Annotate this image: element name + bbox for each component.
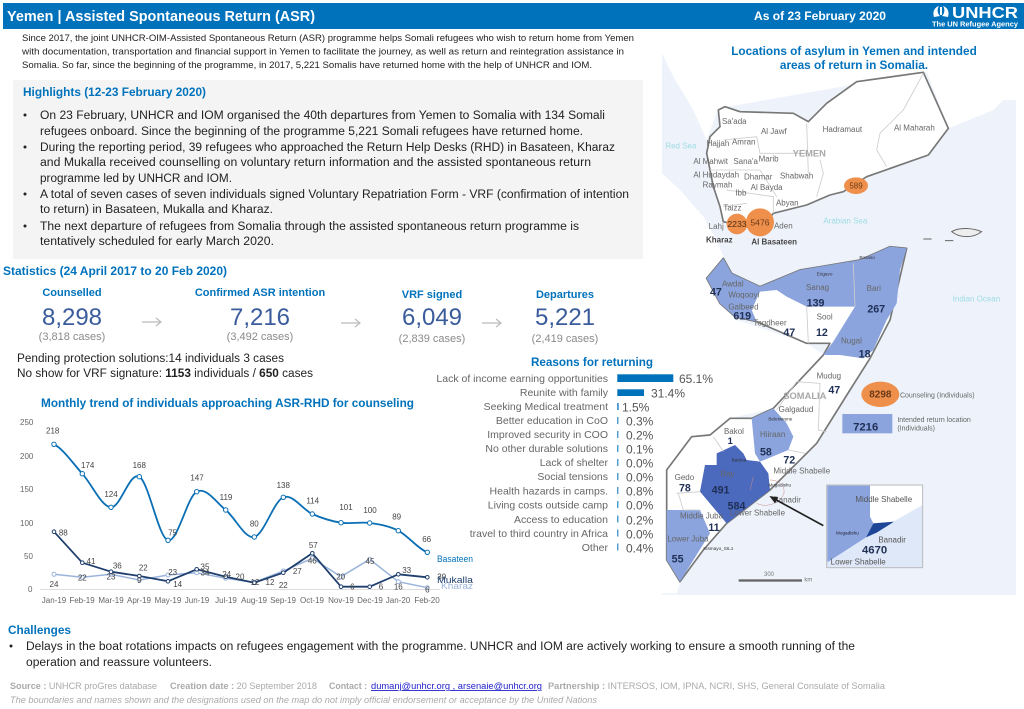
Yemen labels: Al Maharah [894, 123, 935, 132]
data labels: 80 [250, 520, 259, 528]
data labels: 6 [379, 582, 384, 592]
legend: counselling: Counseling (Individuals) [900, 393, 975, 400]
Yemen labels: Hadramaut [823, 125, 863, 134]
sea labels: Red Sea [665, 142, 697, 151]
data labels: 6 [425, 586, 430, 594]
Yemen labels: Abyan [776, 198, 799, 207]
scale bar: km [804, 578, 812, 584]
stat: counselled: (3,818 cases) [39, 331, 105, 343]
Lower Juba [667, 510, 710, 582]
data labels: 114 [306, 496, 320, 506]
intended return values: 139 [807, 297, 825, 309]
data labels: 138 [277, 481, 291, 490]
icon: UNHCR logo: The UN Refugee Agency [932, 22, 1018, 28]
reason labels: No other durable solutions [485, 443, 608, 455]
YEMEN label: YEMEN [793, 149, 826, 159]
reason labels: Other [582, 542, 608, 554]
Somalia labels: Mudug [817, 371, 841, 380]
intended return values: 72 [783, 454, 795, 466]
Somalia labels: Banadir [773, 496, 801, 505]
data labels: 57 [309, 541, 318, 550]
Yemen labels: Ibb [735, 189, 747, 198]
inset map: Banadir [878, 536, 906, 545]
highlights bullets: programme led by UNHCR and IOM. [40, 173, 232, 185]
intended return values: 47 [710, 287, 722, 299]
inset map [827, 485, 923, 568]
stat: VRF signed: (2,839 cases) [399, 333, 465, 345]
y axis labels: 150 [20, 485, 34, 494]
inset map: Lower Shabelle [831, 557, 886, 566]
stat: confirmed ASR intention [195, 287, 325, 343]
data labels: 22 [78, 574, 87, 582]
counselling bubbles: 589 [849, 182, 863, 191]
Somalia labels: Sanag [806, 283, 829, 292]
Somalia labels: Galgadud [779, 405, 813, 414]
Africa land [662, 173, 827, 593]
x axis [40, 588, 440, 590]
scale bar: 300 [764, 572, 775, 578]
Yemen labels: Aden [774, 222, 793, 231]
challenges text: operation and reassure volunteers. [26, 657, 212, 669]
data labels: 9 [137, 576, 142, 585]
data labels: 36 [113, 562, 122, 570]
data labels: 24 [222, 570, 232, 579]
Somalia internal borders [677, 263, 855, 510]
data labels: 41 [87, 557, 96, 566]
data labels: 6 [350, 582, 355, 592]
challenges text: Delays in the boat rotations impacts on refugees engagement with the programme. UNHCR and IOM are actively working to ensure a smooth running of the [26, 641, 855, 653]
reason values: 0.0% [626, 498, 654, 512]
Yemen labels: Marib [759, 155, 779, 164]
reason labels: Lack of shelter [540, 457, 608, 469]
Yemen labels: Dhamar [744, 172, 773, 181]
title: Yemen | Assisted Spontaneous Return (ASR) [7, 9, 315, 25]
intended return values: 47 [783, 327, 795, 339]
data labels: 30 [437, 572, 447, 582]
Yemen labels: Al Bayda [751, 183, 783, 192]
stat: counselled: Counselled [42, 287, 102, 299]
x axis labels: Feb-19 [69, 596, 95, 605]
pending notes [17, 353, 313, 380]
reason values: 1.5% [622, 400, 650, 414]
scale bar [739, 572, 812, 584]
data labels: 89 [392, 512, 402, 522]
upper map region [662, 37, 1016, 593]
Yemen labels: Amran [732, 138, 756, 147]
intro text: Somalia. So far, since the beginning of the programme, in 2017, 5,221 Somalis have returned home with the help of UNHCR and IOM. [22, 60, 592, 71]
Somalia labels: Middle Juba [680, 512, 724, 521]
data labels: 218 [46, 426, 60, 436]
data labels: 24 [50, 580, 59, 589]
reason values: 0.3% [626, 414, 654, 428]
intended return values: 78 [679, 483, 691, 495]
map heading: areas of return in Somalia. [780, 58, 928, 72]
reason labels: Seeking Medical treatment [484, 401, 608, 413]
small place labels: Baidoa [732, 458, 747, 463]
x axis labels [42, 596, 440, 605]
Somalia labels: Bay [721, 470, 734, 479]
intended return values: 1 [728, 436, 733, 446]
data labels: 34 [201, 568, 210, 578]
Somalia labels: Galbeed [728, 302, 759, 311]
data labels: 66 [422, 535, 432, 544]
arrow to inset [769, 496, 823, 526]
inset map: Mogadishu [836, 530, 859, 535]
Somalia labels: Middle Shabelle [773, 466, 831, 475]
legend: counselling: 8298 [869, 390, 892, 401]
highlights bullets: During the reporting period, 39 refugees who approached the Return Help Desks (RHD) in Basateen, Kharaz [40, 142, 615, 154]
icon: UNHCR logo: UNHCR [952, 5, 1018, 22]
x axis labels: Oct-19 [300, 596, 325, 605]
data labels: 35 [201, 562, 210, 572]
data labels [46, 426, 447, 594]
reason labels: travel to third country in Africa [470, 528, 608, 540]
sea background [662, 50, 1016, 595]
intended return values [672, 287, 885, 566]
legend: intended return: Intended return location [897, 417, 971, 424]
y axis labels [20, 418, 34, 594]
stat: VRF signed: VRF signed [402, 289, 462, 301]
data labels: 20 [336, 572, 346, 582]
SOMALIA label: SOMALIA [783, 391, 827, 401]
northern blue regions [707, 247, 907, 358]
small place labels: Kismayo_SIL1 [703, 546, 734, 551]
stat: departures [532, 289, 598, 345]
stat: departures: Departures [536, 289, 594, 301]
reason bars [617, 374, 673, 550]
x axis labels: Jun-19 [185, 596, 210, 605]
small place labels: Erigavo [817, 271, 833, 276]
footer: Contact : [329, 681, 367, 691]
stat: confirmed ASR intention: (3,492 cases) [227, 331, 293, 343]
Somalia labels: Lower Shabelle [730, 508, 786, 517]
intended return values: 619 [733, 310, 751, 322]
x axis labels: Sep-19 [270, 596, 296, 605]
data labels: 124 [104, 490, 118, 499]
icon: UNHCR logo [932, 5, 1018, 28]
series: Basateen [52, 442, 429, 554]
Somalia labels: Hiiraan [760, 430, 785, 439]
x axis labels: Feb-20 [414, 596, 440, 605]
intended return values: 267 [867, 304, 885, 316]
data labels: 23 [168, 568, 178, 577]
challenges text [10, 641, 855, 669]
pending notes: Pending protection solutions:14 individuals 3 cases [17, 353, 284, 365]
y axis labels: 250 [20, 418, 34, 427]
footer: Creation date : 20 September 2018 [170, 681, 317, 691]
Somalia labels: Sool [817, 312, 833, 321]
location labels: Al Basateen [751, 237, 797, 246]
Somalia base [667, 247, 907, 582]
inset map: 4670 [862, 545, 887, 557]
Somalia labels: Gedo [675, 473, 695, 482]
reason labels: Reunite with family [520, 387, 609, 399]
stat: counselled: 8,298 [42, 304, 102, 331]
sea labels: Arabian Sea [823, 216, 868, 225]
header bar [3, 3, 1024, 29]
date: As of 23 February 2020 [754, 11, 886, 23]
highlights bullets: refugees onboard. Since the beginning of the programme 5,221 Somali refugees have returned home. [40, 126, 583, 138]
x axis labels: Dec-19 [357, 596, 383, 605]
counselling bubbles: 2233 [727, 219, 747, 229]
reason labels: Better education in CoO [496, 415, 608, 427]
data labels: 20 [236, 572, 245, 582]
data labels: 12 [266, 578, 275, 587]
reason labels: Social tensions [537, 471, 608, 483]
intended return values: 58 [760, 447, 772, 459]
Hiiraan [752, 408, 793, 462]
reason labels: Improved security in COO [487, 429, 608, 441]
Yemen labels: Lahj [709, 222, 724, 231]
line chart: monthly trend [20, 418, 474, 605]
footer [10, 681, 885, 705]
x axis labels: May-19 [155, 596, 182, 605]
small place labels: Mogadishu [768, 483, 792, 488]
data labels: 16 [394, 582, 403, 592]
intro text: Since 2017, the joint UNHCR-OIM-Assisted Spontaneous Return (ASR) programme helps Somali refugees who wish to return home from Yemen [22, 33, 634, 44]
stat: VRF signed [399, 289, 465, 345]
Yemen labels: Shabwah [780, 172, 813, 181]
data labels: 33 [402, 566, 412, 575]
intended return values: 12 [816, 327, 828, 339]
reason values: 0.1% [626, 442, 654, 456]
reason values: 65.1% [679, 372, 713, 386]
highlights bullets: and Mukalla received counselling on voluntary return information and the assisted spontaneous return [40, 157, 591, 169]
highlights bullets: On 23 February, UNHCR and IOM organised the 40th departures from Yemen to Somalia with 134 Somali [40, 110, 605, 122]
Yemen internal borders [710, 73, 923, 213]
data labels: 22 [279, 581, 288, 590]
Somalia labels: Lower Juba [667, 535, 709, 544]
reason values: 0.4% [626, 542, 654, 556]
Bakol and Bay [700, 445, 770, 523]
Somalia labels: Togdheer [753, 319, 787, 328]
intro text [21, 33, 634, 71]
Somalia labels: Awdal [722, 280, 744, 289]
Yemen labels: Hajjah [707, 139, 729, 148]
reasons for returning bar chart [436, 357, 713, 556]
Somalia labels: Bari [867, 284, 881, 293]
highlights bullets: tentatively scheduled for early March 2020. [40, 236, 274, 248]
reason labels: Health hazards in camps. [490, 486, 608, 498]
data labels: 45 [366, 557, 375, 566]
data labels: 88 [59, 528, 68, 538]
Yemen [707, 72, 948, 230]
sea labels: Indian Ocean [953, 294, 1000, 303]
data labels: 100 [363, 506, 377, 515]
highlights bullets: A total of seven cases of seven individuals signed Voluntary Repatriation Form - VRF (confirmation of intention [40, 189, 629, 201]
stat: departures: (2,419 cases) [532, 333, 598, 345]
data labels: 27 [293, 567, 302, 576]
Yemen labels: Taizz [723, 204, 742, 213]
series labels: Mukalla [437, 575, 473, 585]
arrow [341, 319, 360, 327]
pending notes: No show for VRF signature: 1153 individuals / 650 cases [17, 368, 313, 380]
reason labels [436, 373, 609, 554]
sea labels [665, 142, 1000, 303]
x axis labels: Jan-19 [42, 596, 67, 605]
series labels: Basateen [437, 554, 473, 564]
challenges heading: Challenges [8, 625, 71, 637]
data labels: 22 [139, 564, 148, 572]
counselling bubbles: 5476 [750, 217, 770, 227]
Somalia labels: Woqooyi [728, 291, 759, 300]
x axis labels: Apr-19 [127, 596, 152, 605]
small place labels [703, 255, 875, 551]
location labels: Kharaz [706, 236, 733, 245]
data labels: 46 [308, 556, 317, 566]
data labels: 168 [133, 461, 147, 470]
location labels [706, 236, 797, 246]
x axis labels: Mar-19 [98, 596, 124, 605]
series: Mukalla [52, 556, 429, 590]
data labels: 101 [339, 503, 353, 512]
legend: intended return: (Individuals) [897, 426, 935, 433]
Socotra [923, 229, 982, 241]
reason labels: Living costs outside camp [488, 500, 608, 512]
stat: confirmed ASR intention: Confirmed ASR intention [195, 287, 325, 299]
Somalia labels [667, 280, 881, 544]
data labels: 75 [168, 528, 178, 538]
highlights bullets: to return) in Basateen, Mukalla and Kharaz. [40, 204, 273, 216]
footer: Source : UNHCR proGres database [10, 681, 157, 691]
map heading [731, 44, 977, 72]
inset map: Middle Shabelle [855, 495, 913, 504]
Yemen labels: Sa'ada [722, 117, 747, 126]
legend: intended return [842, 414, 971, 434]
y axis labels: 100 [20, 519, 34, 528]
intro text: with documentation, transportation and financial support in Yemen to facilitate the journey, as well as return and reintegration assistance in [21, 46, 624, 58]
counselling bubbles [727, 177, 868, 236]
Yemen labels: Al Mahwit [693, 157, 729, 166]
intended return values: 55 [672, 554, 684, 566]
intended return values: 18 [859, 348, 871, 360]
reason values: 0.2% [626, 428, 654, 442]
highlights bullets [24, 110, 629, 248]
highlights bullets: The next departure of refugees from Somalia through the assisted spontaneous return programme is [40, 221, 579, 233]
Yemen labels: Al Hudaydah [693, 170, 739, 179]
intended return values: 47 [828, 384, 840, 396]
legend: intended return: 7216 [853, 422, 878, 434]
reason values [622, 372, 713, 556]
reason values: 0.8% [626, 484, 654, 498]
reason labels: Lack of income earning opportunities [436, 373, 608, 385]
map of Yemen and Somalia [662, 37, 1016, 595]
reason values: 0.2% [626, 514, 654, 528]
stat: departures: 5,221 [535, 304, 595, 331]
reason values: 0.0% [626, 528, 654, 542]
intended return values: 11 [708, 522, 720, 534]
Yemen labels: Raymah [703, 180, 732, 189]
series: Kharaz [52, 530, 429, 588]
y axis labels: 200 [20, 452, 34, 461]
x axis labels: Nov-19 [328, 596, 354, 605]
data labels: 12 [251, 578, 260, 587]
series labels [437, 554, 474, 591]
data labels: 23 [107, 572, 116, 582]
y axis labels: 0 [28, 585, 33, 594]
Somalia labels: Bakol [724, 427, 744, 436]
panel: highlights [13, 80, 643, 259]
stat: confirmed ASR intention: 7,216 [230, 304, 290, 331]
highlights heading: Highlights (12-23 February 2020) [23, 85, 206, 99]
stat: counselled [39, 287, 105, 343]
data labels: 119 [220, 493, 233, 502]
Yemen labels: Al Jawf [761, 127, 788, 136]
footer: The boundaries and names shown and the designations used on the map do not imply official endorsement or acceptance by the United Nations [10, 695, 598, 705]
x axis labels: Jul-19 [215, 596, 237, 605]
data labels: 147 [190, 474, 204, 482]
reason labels: Access to education [514, 514, 608, 526]
stat: VRF signed: 6,049 [402, 304, 462, 331]
lower map region [667, 247, 975, 584]
Somalia labels: Nugal [841, 336, 862, 345]
statistics heading: Statistics (24 April 2017 to 20 Feb 2020) [3, 266, 227, 278]
arrow [482, 319, 501, 327]
reason values: 31.4% [651, 386, 685, 400]
challenges [8, 625, 855, 669]
reason values: 0.0% [626, 456, 654, 470]
land north of Yemen [662, 37, 1016, 140]
small place labels: Beletweyne [768, 417, 793, 422]
reasons heading: Reasons for returning [531, 357, 653, 369]
x axis labels: Jan-20 [386, 596, 411, 605]
Yemen labels [693, 117, 935, 231]
data labels: 14 [173, 580, 183, 589]
footer: Partnership : INTERSOS, IOM, IPNA, NCRI, SHS, General Consulate of Somalia [548, 681, 885, 691]
Yemen labels: Sana'a [733, 157, 759, 166]
intended return values: 491 [712, 484, 730, 496]
reason values: 0.0% [626, 470, 654, 484]
map heading: Locations of asylum in Yemen and intended [731, 44, 977, 58]
x axis labels: Aug-19 [241, 596, 267, 605]
footer: dumanj@unhcr.org , arsenaie@unhcr.org [371, 681, 542, 691]
small place labels: Bosaso [859, 255, 875, 260]
intended return values: 584 [728, 500, 746, 512]
series labels: Kharaz [441, 581, 474, 591]
arrow [142, 318, 161, 326]
data labels: 174 [81, 461, 95, 470]
y axis labels: 50 [24, 552, 33, 561]
chart heading: Monthly trend of individuals approaching ASR-RHD for counseling [41, 398, 414, 410]
legend: counselling [861, 382, 975, 407]
